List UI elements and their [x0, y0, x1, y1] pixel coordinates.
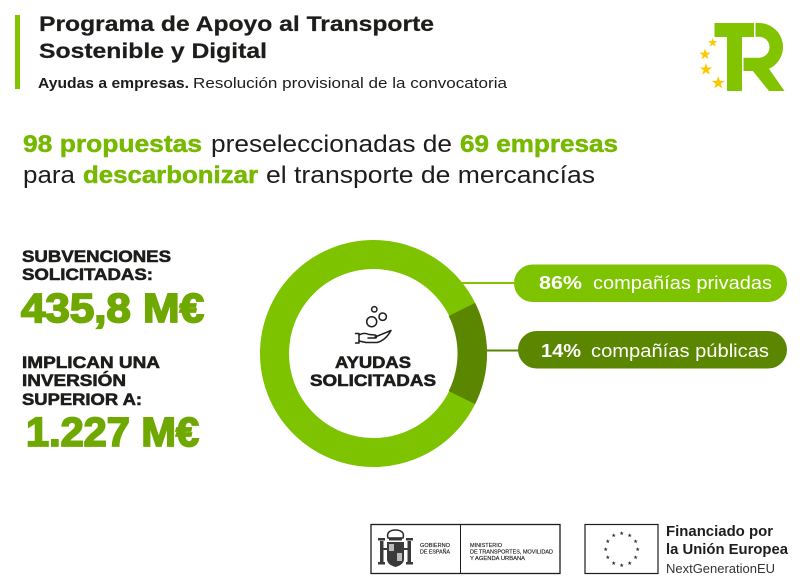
donut centre label: SOLICITADAS — [310, 371, 436, 390]
pill: 14% compañías públicas: 14% — [541, 341, 581, 361]
connector lines — [460, 282, 519, 352]
title — [39, 13, 434, 63]
pill: 86% compañías privadas — [514, 264, 787, 302]
subtitle — [38, 76, 508, 92]
icon: TR logo — [699, 23, 784, 91]
value: 1.227 M€: 1.227 M€ — [26, 409, 199, 455]
logo: Gobierno de España: DE TRANSPORTES, MOVILIDAD — [470, 550, 553, 556]
stat: inversión superior: INVERSIÓN — [22, 371, 126, 390]
headline: el transporte de mercancías — [266, 162, 595, 189]
stat: inversión superior: SUPERIOR A: — [22, 390, 142, 409]
segment: 14% públicas — [449, 303, 487, 404]
headline: 98 propuestas — [23, 131, 202, 158]
stat: inversión superior — [22, 353, 199, 455]
logo: Financiado por la Unión Europea: la Unión Europea — [666, 542, 789, 558]
header — [15, 13, 508, 92]
headline: descarbonizar — [83, 162, 258, 189]
icon: EU flag — [585, 524, 658, 574]
title: Programa de Apoyo al Transporte — [39, 13, 434, 36]
pill: 14% compañías públicas: compañías públicas — [591, 341, 769, 361]
logo: Gobierno de España: Y AGENDA URBANA — [470, 556, 525, 562]
pill: 86% compañías privadas: 86% — [539, 273, 582, 293]
headline: 69 empresas — [460, 131, 618, 158]
donut chart — [274, 254, 487, 452]
accent bar — [15, 15, 20, 89]
title: Sostenible y Digital — [39, 40, 267, 63]
pill: 86% compañías privadas: compañías privadas — [593, 273, 772, 293]
subtitle: Resolución provisional de la convocatoria — [193, 76, 508, 92]
logo: Gobierno de España: DE ESPAÑA — [420, 548, 450, 556]
stat: subvenciones solicitadas: SUBVENCIONES — [22, 247, 171, 266]
value: 435,8 M€: 435,8 M€ — [21, 285, 204, 331]
subtitle: Ayudas a empresas. — [38, 76, 189, 92]
logo: Gobierno de España: MINISTERIO — [470, 543, 502, 549]
logo: Financiado por la Unión Europea — [585, 524, 789, 576]
icon: hand with coins — [356, 307, 391, 343]
donut centre label: AYUDAS — [335, 353, 411, 372]
logo: Gobierno de España: GOBIERNO — [420, 543, 450, 549]
logo: Financiado por la Unión Europea: NextGenerationEU — [666, 562, 775, 576]
stat: inversión superior: IMPLICAN UNA — [22, 353, 160, 372]
logo: Gobierno de España — [371, 524, 560, 574]
headline: preseleccionadas de — [211, 131, 452, 158]
icon: coat of arms — [378, 530, 413, 567]
headline — [23, 131, 618, 189]
stat: subvenciones solicitadas — [21, 247, 204, 331]
donut centre label — [310, 307, 436, 390]
headline: para — [23, 162, 75, 189]
logo: Financiado por la Unión Europea: Financiado por — [666, 524, 773, 540]
pill: 14% compañías públicas — [518, 331, 787, 368]
stat: subvenciones solicitadas: SOLICITADAS: — [22, 265, 153, 284]
